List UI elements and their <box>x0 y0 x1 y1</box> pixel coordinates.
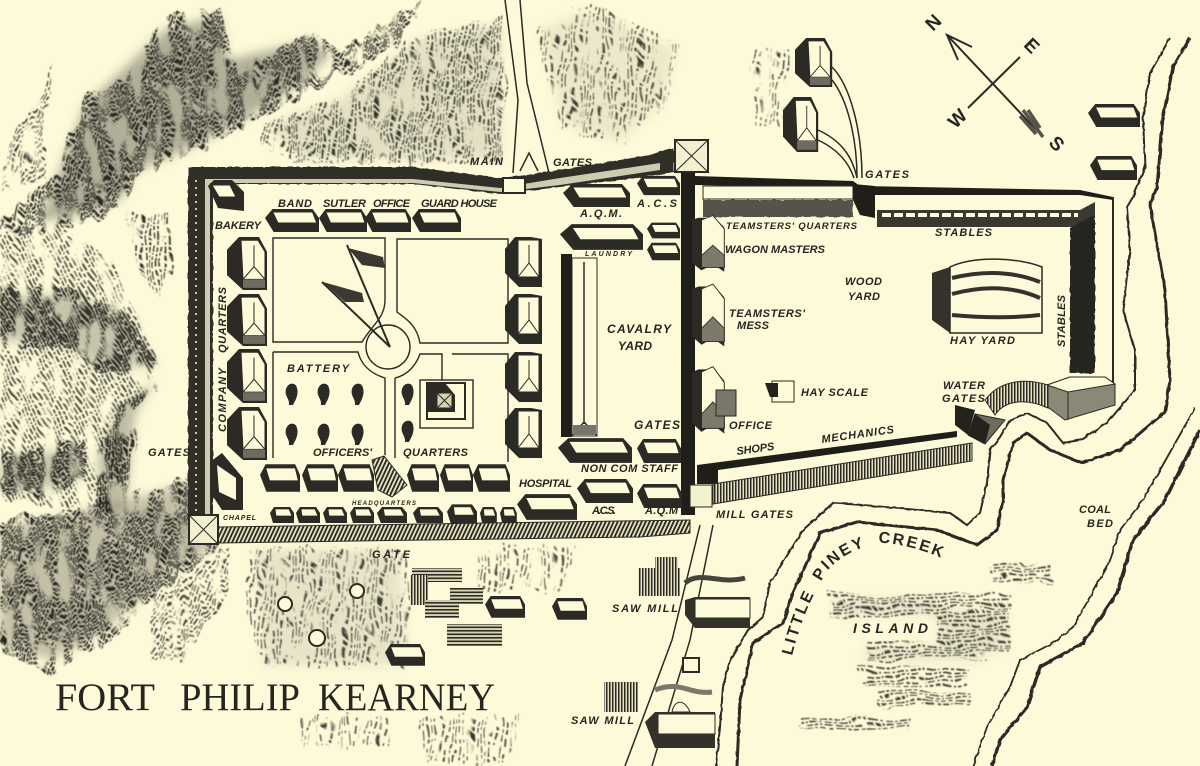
outlying north buildings <box>783 38 1140 180</box>
map labels: BATTERY <box>287 363 351 375</box>
compass rose: S <box>1044 132 1068 156</box>
long cavalry stable <box>561 254 597 437</box>
map labels: A.C.S <box>636 198 678 210</box>
dark west ridges <box>0 287 160 373</box>
map labels: NON COM STAFF <box>581 463 678 475</box>
teamsters mess building <box>692 284 724 346</box>
main gate opening <box>503 178 525 193</box>
east stables <box>1070 215 1095 373</box>
west gate quarters <box>210 453 243 510</box>
map labels: GATES <box>942 393 986 405</box>
chapel row of small buildings <box>270 504 517 524</box>
map labels: SAW MILL <box>612 603 678 615</box>
map labels: COMPANY <box>217 366 229 432</box>
west hillside <box>0 225 165 510</box>
compass rose: W <box>944 105 972 133</box>
map labels: YARD <box>848 291 880 303</box>
southeast wall mechanics shops <box>697 431 972 504</box>
map labels: LAUNDRY <box>585 251 633 258</box>
parade ground paths and circle <box>273 238 508 462</box>
map labels: A.Q.M. <box>579 208 622 220</box>
slope right of road <box>535 3 682 147</box>
map labels: OFFICE <box>729 420 773 432</box>
north slope streaks <box>263 15 505 163</box>
band, sutler, office, guard house <box>265 209 461 232</box>
roads <box>505 0 862 766</box>
map labels: MESS <box>737 320 770 332</box>
mill gate <box>690 485 712 507</box>
Little Piney Creek banks <box>716 38 1200 766</box>
gate tower <box>853 184 875 218</box>
map labels: HAY SCALE <box>801 387 869 399</box>
teamsters quarters <box>703 186 853 217</box>
south meadow streaks east <box>475 547 578 592</box>
island marsh hachures <box>800 563 1050 730</box>
map labels: WAGON MASTERS <box>725 244 826 256</box>
officers quarters row <box>260 464 510 492</box>
flagpoles and flags <box>322 245 390 347</box>
map labels: BED <box>1087 518 1113 530</box>
map labels: GATES <box>148 447 191 459</box>
map labels: CHAPEL <box>223 515 256 522</box>
stable windows <box>882 213 1078 217</box>
map labels: WOOD <box>845 276 882 288</box>
terrain shading under hachures <box>0 10 1005 665</box>
map labels: STABLES <box>935 227 993 239</box>
southwest hillside <box>0 478 222 675</box>
map labels: SHOPS <box>736 441 776 458</box>
saw mills and lumber stacks <box>604 557 750 748</box>
hay scale <box>765 381 794 402</box>
east quarters row <box>505 237 542 458</box>
wall speckle <box>195 180 197 515</box>
map labels: HOSPITAL <box>519 478 572 490</box>
creek label: LITTLE PINEY CREEK <box>782 532 944 655</box>
north blockhouse <box>675 140 708 172</box>
compass rose <box>922 11 1068 156</box>
company quarters row <box>227 237 267 460</box>
outlying south buildings <box>385 568 587 666</box>
south meadow streaks <box>245 548 412 668</box>
map labels: MAIN <box>470 156 504 168</box>
map labels: GUARD HOUSE <box>421 198 498 210</box>
map labels: GATE <box>372 549 411 561</box>
map labels: GATES <box>865 169 910 181</box>
map labels: HEADQUARTERS <box>352 501 416 507</box>
map labels: QUARTERS <box>403 447 469 459</box>
map labels: A.Q.M <box>644 505 679 517</box>
fort east compound <box>690 176 1115 507</box>
map labels: MILL GATES <box>716 509 794 521</box>
title <box>55 676 495 719</box>
dark west swath <box>0 440 85 495</box>
magazine <box>427 383 465 419</box>
bottom streaks <box>300 717 525 763</box>
southeast corner blockhouse <box>1045 377 1115 420</box>
stables north <box>877 202 1095 227</box>
north wall <box>695 176 1113 200</box>
southwest blockhouse <box>189 515 218 544</box>
map labels: HAY YARD <box>950 335 1015 347</box>
map labels: OFFICE <box>373 198 411 210</box>
round trees in south meadow <box>278 584 364 646</box>
terrain: hill hachures <box>0 0 790 763</box>
office building <box>692 367 736 434</box>
east outer wall <box>1112 197 1114 384</box>
map labels: TEAMSTERS' QUARTERS <box>726 221 858 232</box>
water gate block <box>955 405 1005 444</box>
hospital, staff and storehouse buildings <box>517 176 682 520</box>
fort west compound <box>188 140 708 544</box>
map labels: GATES <box>553 157 593 169</box>
map labels: OFFICERS' <box>313 447 372 459</box>
wall walkway: west and north <box>205 163 660 520</box>
hay yard <box>932 259 1042 333</box>
map labels: BAND <box>278 198 312 210</box>
south palisade wall <box>218 520 690 543</box>
title: FORT <box>55 676 155 719</box>
map labels: BAKERY <box>215 220 263 232</box>
compass rose: N <box>922 11 946 35</box>
map labels: ISLAND <box>853 620 928 636</box>
curved water gate wall <box>985 381 1048 415</box>
compass rose: E <box>1019 34 1043 58</box>
bakery <box>208 180 244 211</box>
map labels: TEAMSTERS' <box>729 308 805 320</box>
map labels: SUTLER <box>323 198 366 210</box>
outer wall: west and north <box>188 149 674 525</box>
map labels: STABLES <box>1056 294 1068 347</box>
map labels: CAVALRY <box>607 322 672 336</box>
wagon masters building <box>692 216 724 272</box>
dark west spur <box>96 375 160 513</box>
map labels: WATER <box>943 380 985 392</box>
map labels: COAL <box>1079 504 1111 516</box>
map labels: MECHANICS <box>821 424 895 446</box>
far-left streak <box>0 63 58 190</box>
south slope <box>150 548 230 660</box>
map labels <box>148 156 1113 727</box>
headquarters building <box>372 456 407 497</box>
map labels: SAW MILL <box>571 715 634 727</box>
map labels: A.C.S. <box>591 505 616 517</box>
map labels: YARD <box>618 339 652 353</box>
title: PHILIP <box>180 676 300 719</box>
map labels: GATES <box>634 418 680 432</box>
grove by north buildings <box>755 48 790 128</box>
small grove <box>127 213 173 300</box>
title: KEARNEY <box>318 676 495 719</box>
battery cannons <box>286 384 414 445</box>
dark ridge northwest <box>0 0 424 235</box>
center dividing wall <box>681 170 695 515</box>
map labels: QUARTERS <box>217 286 229 353</box>
